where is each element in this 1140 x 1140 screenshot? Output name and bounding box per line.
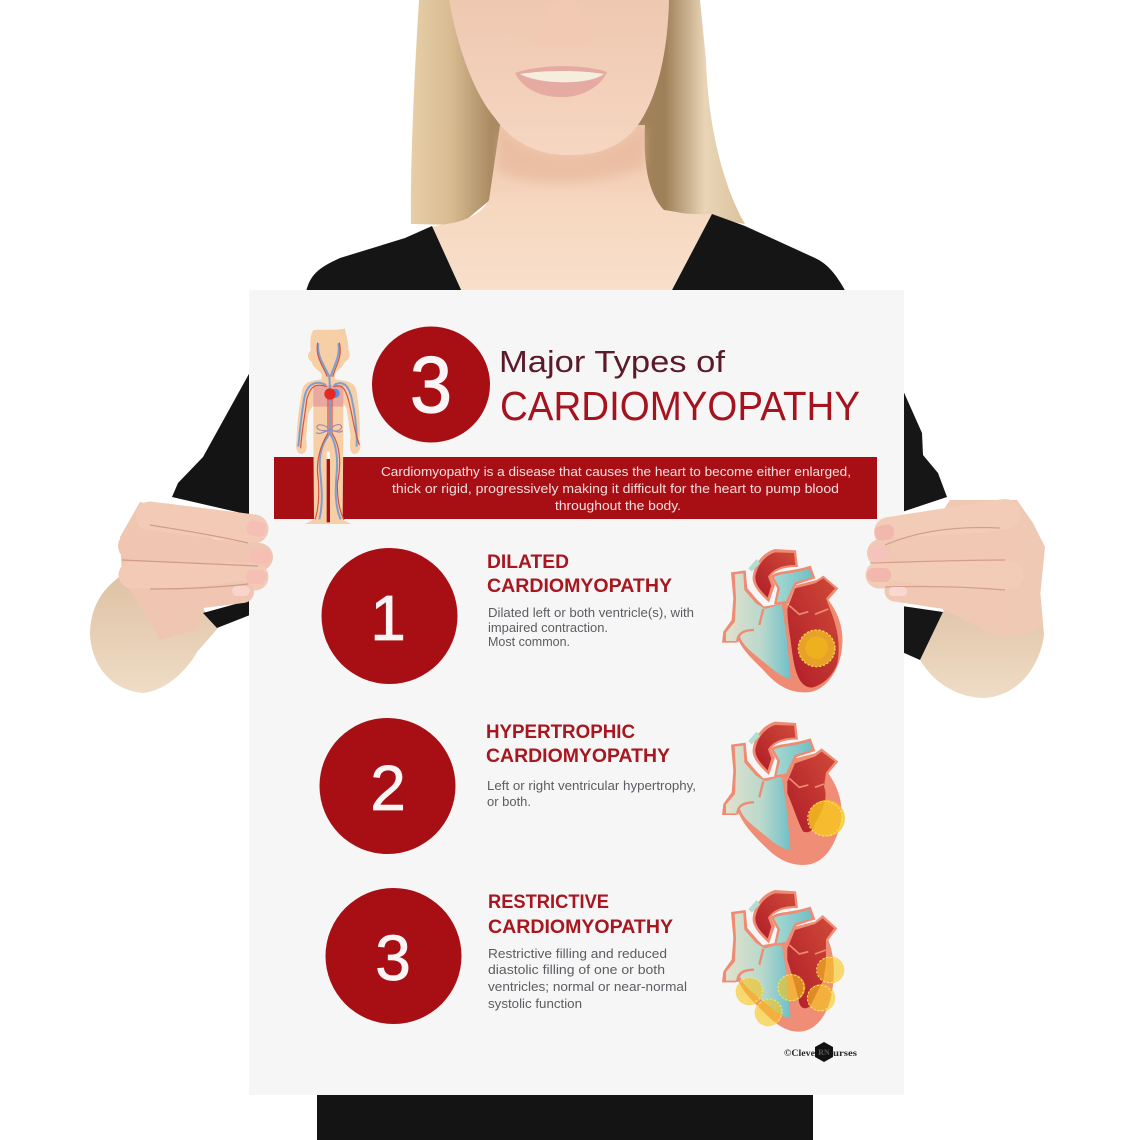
heading 3: CARDIOMYOPATHY [488,917,673,938]
heading 3 [488,892,673,938]
number circle 3 [326,888,462,1024]
mouth [515,66,607,97]
heading 2 [486,722,670,767]
number circle 1: 1 [370,582,406,654]
heading 3: RESTRICTIVE [488,892,609,913]
description 3: systolic function [488,997,582,1011]
icon: heart with restricted filling [722,890,844,1032]
right sleeve [902,388,947,660]
left arm [90,575,218,693]
black shirt top [306,214,846,292]
banner background [274,457,877,519]
shirt bottom [317,1090,813,1140]
intro text: throughout the body. [555,499,681,513]
description 2: or both. [487,795,531,809]
description 3: ventricles; normal or near-normal [488,980,687,994]
intro text [381,465,851,513]
icon: heart with thickened wall [722,722,845,865]
left sleeve [172,372,250,628]
number circle 2 [320,718,456,854]
right hand [867,500,1045,637]
heading 1: CARDIOMYOPATHY [487,576,672,597]
neck and chest [428,125,712,295]
description 1: Most common. [488,635,570,649]
title [499,344,860,429]
intro text: Cardiomyopathy is a disease that causes the heart to become either enlarged, [381,465,851,479]
logo: CleverRN Nurses: RN [818,1048,830,1057]
logo: CleverRN Nurses [784,1042,857,1062]
description 1: Dilated left or both ventricle(s), with [488,606,694,620]
panel: dilated cardiomyopathy [322,548,842,692]
right arm [920,590,1044,698]
left hand [120,502,271,640]
icon: body with blood vessels [296,328,360,524]
hair [411,0,745,225]
logo: CleverRN Nurses: urses [833,1049,857,1059]
title: Major Types of [499,344,725,379]
nose [532,0,592,47]
face [449,0,669,155]
heading 1: DILATED [487,552,569,573]
description 3: Restrictive filling and reduced [488,947,667,961]
number circle 1 [322,548,458,684]
panel: hypertrophic cardiomyopathy [320,718,845,865]
title: CARDIOMYOPATHY [500,383,860,429]
number circle 3: 3 [375,922,411,994]
poster sheet [249,290,904,1095]
number circle 2: 2 [370,752,406,824]
heading 2: CARDIOMYOPATHY [486,746,670,767]
heading 1 [487,552,672,597]
description 3 [488,947,687,1011]
description 2: Left or right ventricular hypertrophy, [487,779,696,793]
intro text: thick or rigid, progressively making it difficult for the heart to pump blood [392,482,839,496]
description 1 [488,606,694,649]
heading 2: HYPERTROPHIC [486,722,635,743]
number circle: 3 [372,326,490,442]
number circle: 3: 3 [410,340,452,429]
description 1: impaired contraction. [488,621,608,635]
description 2 [487,779,696,809]
icon: heart with dilated ventricle [722,549,842,692]
description 3: diastolic filling of one or both [488,963,665,977]
logo: CleverRN Nurses: ©Cleve [784,1048,815,1059]
panel: restrictive cardiomyopathy [326,888,844,1032]
chin shadow [497,125,645,183]
